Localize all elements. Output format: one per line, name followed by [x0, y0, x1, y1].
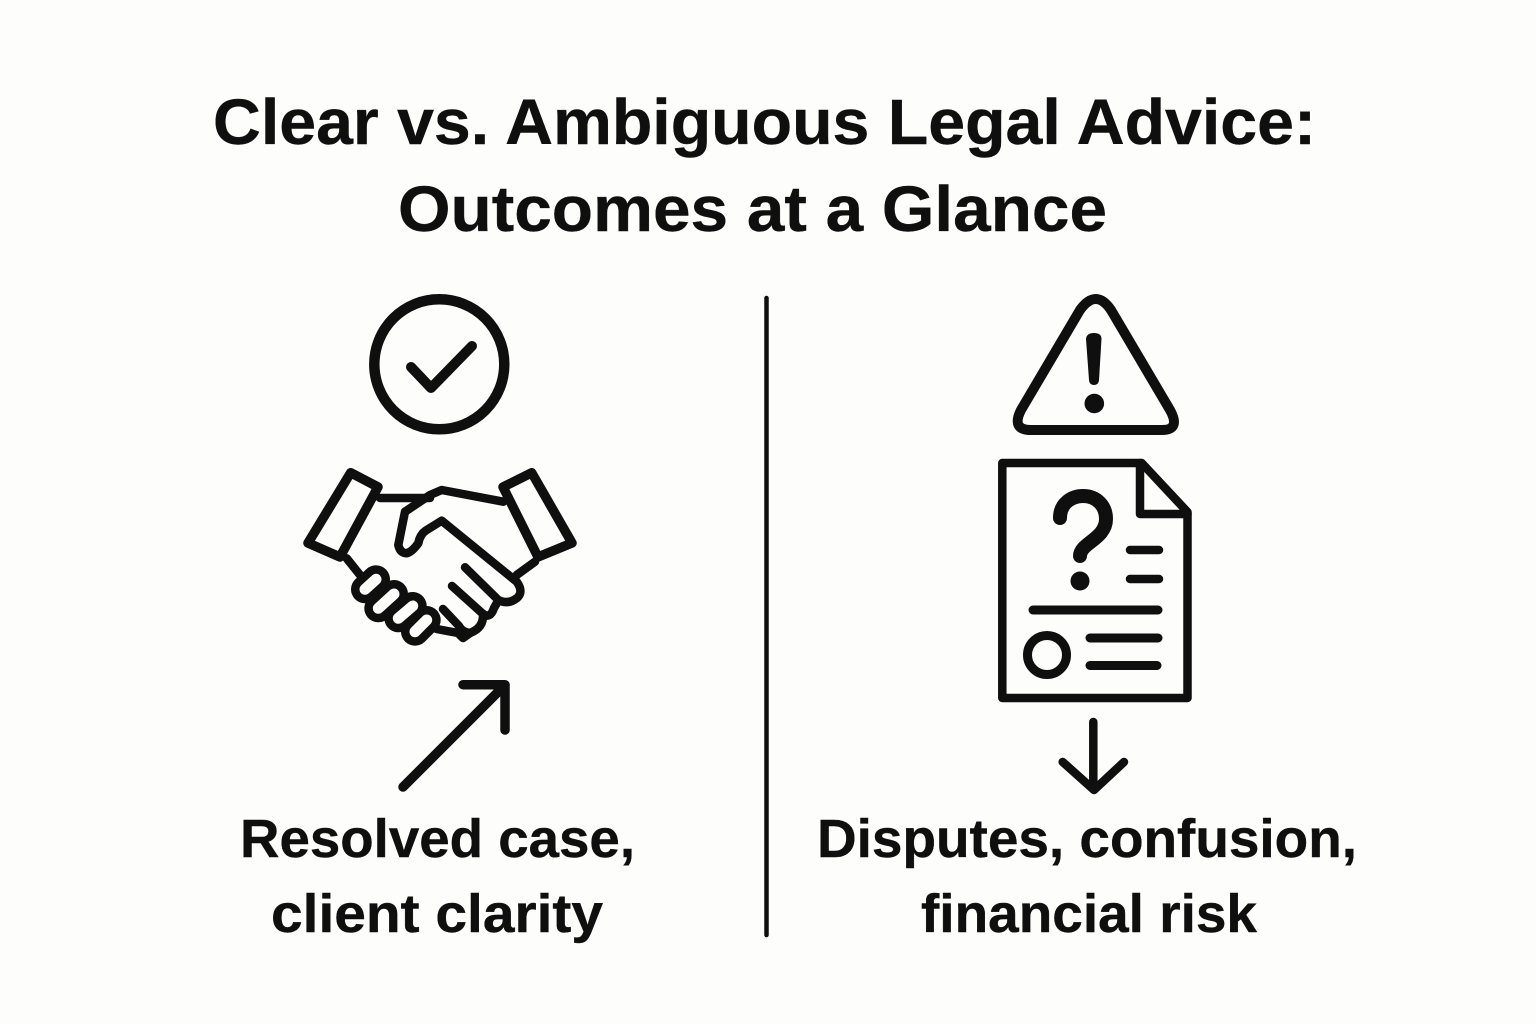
text: clear advice outcome	[240, 809, 635, 944]
panel: ambiguous advice	[817, 299, 1357, 944]
arrow: down	[1063, 722, 1124, 790]
icon: warning triangle	[1018, 299, 1174, 430]
title	[213, 86, 1316, 245]
text: clear advice outcome: Resolved case,	[240, 809, 635, 869]
icon: handshake	[308, 473, 572, 638]
text: clear advice outcome: client clarity	[271, 884, 603, 944]
text: ambiguous advice outcome: Disputes, confusion,	[817, 809, 1357, 869]
center divider	[764, 298, 769, 935]
text: ambiguous advice outcome	[817, 809, 1357, 944]
title: Clear vs. Ambiguous Legal Advice:	[213, 86, 1316, 158]
panel: clear advice	[240, 299, 635, 944]
icon: document with question mark	[1002, 463, 1188, 698]
arrow: up and to the right	[403, 685, 505, 787]
icon: check mark in circle	[374, 299, 504, 429]
title: Outcomes at a Glance	[398, 173, 1107, 245]
text: ambiguous advice outcome: financial risk	[921, 884, 1258, 944]
